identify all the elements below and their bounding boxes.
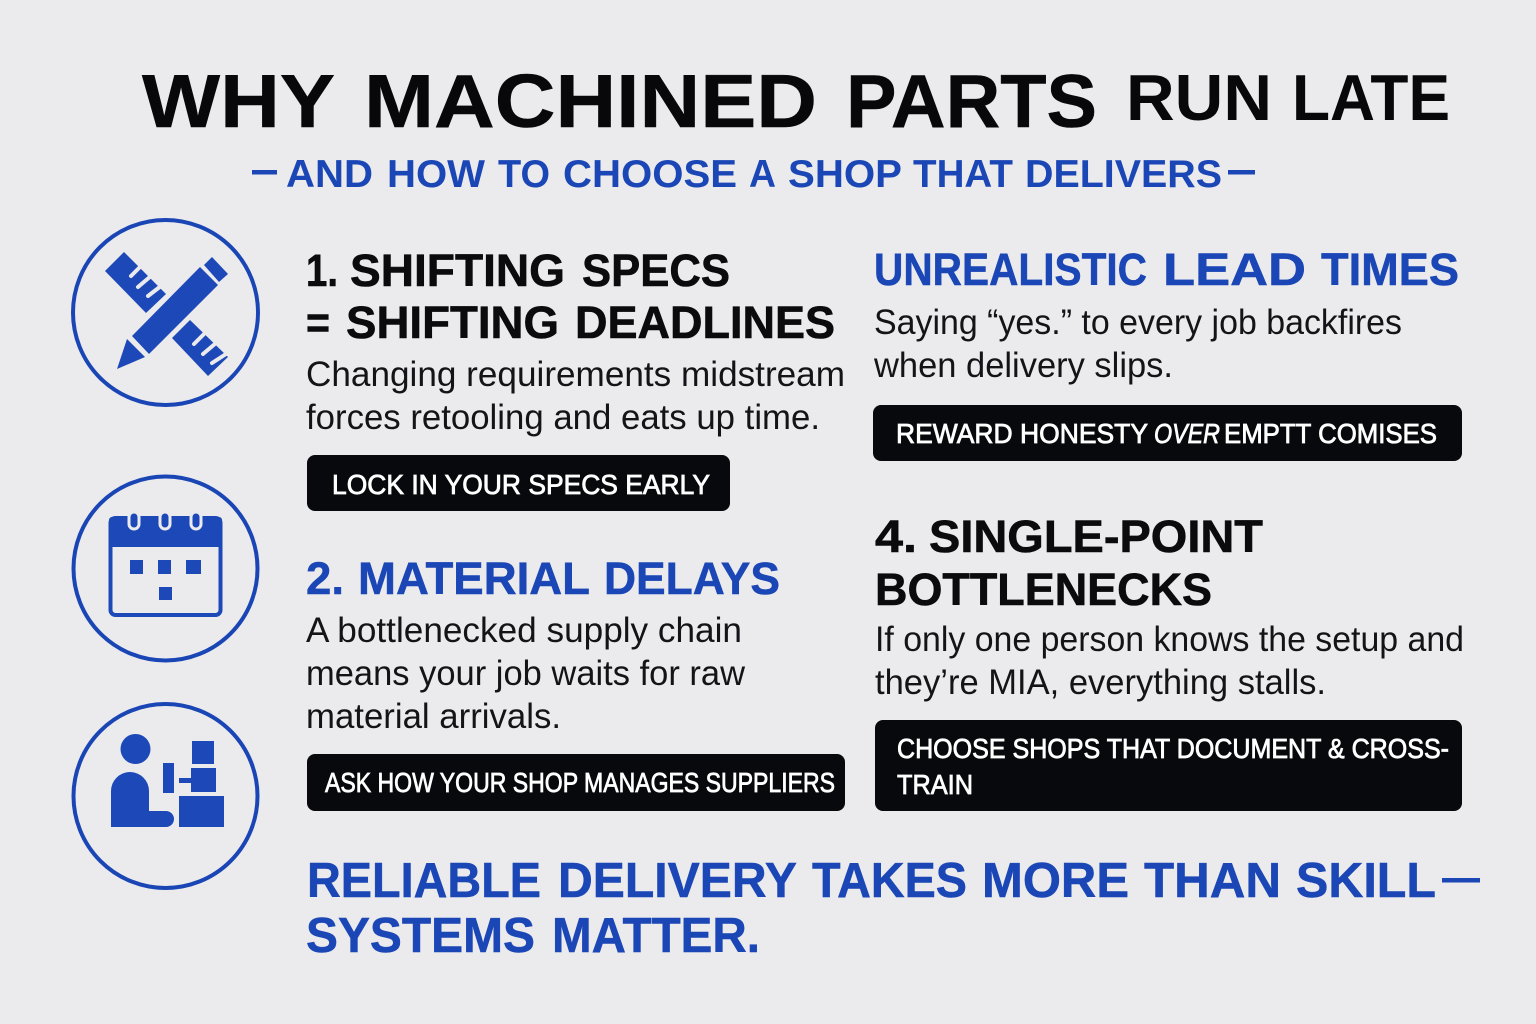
callout: reward honesty: OVER [1154,418,1220,449]
subtitle: AND [286,153,373,196]
callout: lock in specs [307,455,730,511]
body text: unrealistic lead times: Saying “yes.” to every job backfires [874,303,1402,342]
subtitle: SHOP [788,153,902,196]
heading: unrealistic lead times: UNREALISTIC [874,244,1147,295]
callout: document and cross-train: TRAIN [897,769,973,800]
heading: shifting specs: SHIFTING [346,297,559,348]
heading: shifting specs: 1. [306,245,338,296]
body text: shifting specs [306,355,845,437]
title: LATE [1292,61,1450,134]
heading: unrealistic lead times: TIMES [1321,244,1459,295]
heading: material delays: MATERIAL [358,553,590,604]
title: WHY [142,59,335,143]
heading: shifting specs [306,245,835,348]
heading: single-point bottlenecks: 4. [875,511,917,562]
closing statement: SKILL [1296,854,1436,908]
body text: unrealistic lead times [873,303,1402,385]
heading: shifting specs: SPECS [582,245,730,296]
body text: unrealistic lead times: when delivery slips. [873,346,1173,385]
heading: single-point bottlenecks [875,511,1263,615]
body text: material delays: material arrivals. [306,697,561,736]
subtitle: DELIVERS [1025,153,1222,196]
heading: shifting specs: = [306,297,330,348]
body text: material delays [306,611,746,736]
section 4: single-point bottlenecks [875,511,1464,811]
heading: unrealistic lead times [874,244,1459,295]
subtitle: HOW [387,153,485,196]
callout: document and cross-train [875,720,1462,811]
icon: calendar [74,476,258,660]
callout: document and cross-train: CHOOSE SHOPS THAT DOCUMENT & CROSS- [897,733,1449,764]
closing statement: MORE [982,854,1129,908]
heading: material delays: 2. [306,553,344,604]
heading: single-point bottlenecks: SINGLE-POINT [929,511,1263,562]
callout: reward honesty [873,405,1462,461]
callout: lock in specs: LOCK IN YOUR SPECS EARLY [332,469,710,500]
closing statement: SYSTEMS [306,909,535,963]
body text: single-point bottlenecks: If only one person knows the setup and [875,620,1464,659]
closing statement: THAN [1144,854,1281,908]
heading: unrealistic lead times: LEAD [1163,244,1306,295]
body text: material delays: means your job waits for raw [306,654,746,693]
closing statement: MATTER. [552,909,760,963]
body text: shifting specs: forces retooling and eats up time. [306,398,820,437]
title: RUN [1126,61,1272,134]
body text: shifting specs: Changing requirements midstream [306,355,845,394]
body text: single-point bottlenecks: they’re MIA, everything stalls. [875,663,1326,702]
body text: material delays: A bottlenecked supply chain [306,611,742,650]
icon: person at workstation [74,704,258,888]
heading: material delays [306,553,780,604]
title [142,59,1450,143]
heading: shifting specs: DEADLINES [575,297,835,348]
closing statement [306,854,1480,963]
heading: material delays: DELAYS [604,553,780,604]
closing statement: TAKES [812,854,967,908]
callout: ask about suppliers: ASK HOW YOUR SHOP MANAGES SUPPLIERS [325,767,835,798]
body text: single-point bottlenecks [875,620,1464,702]
icon: crossed ruler and pencil [73,220,258,405]
closing statement: RELIABLE [307,854,541,908]
closing statement: DELIVERY [558,854,797,908]
section 2: material delays [306,553,845,811]
subtitle: CHOOSE [563,153,737,196]
section 1: shifting specs [306,245,845,511]
heading: single-point bottlenecks: BOTTLENECKS [875,564,1212,615]
callout: ask about suppliers [307,754,845,811]
callout: reward honesty: EMPTT COMISES [1224,418,1437,449]
subtitle: TO [498,153,550,196]
subtitle [252,153,1255,196]
subtitle: THAT [913,153,1013,196]
title: MACHINED [364,59,817,143]
subtitle: A [749,153,776,196]
section 3: unrealistic lead times [873,244,1462,461]
heading: shifting specs: SHIFTING [350,245,565,296]
title: PARTS [846,59,1097,143]
callout: reward honesty: REWARD HONESTY [896,418,1148,449]
